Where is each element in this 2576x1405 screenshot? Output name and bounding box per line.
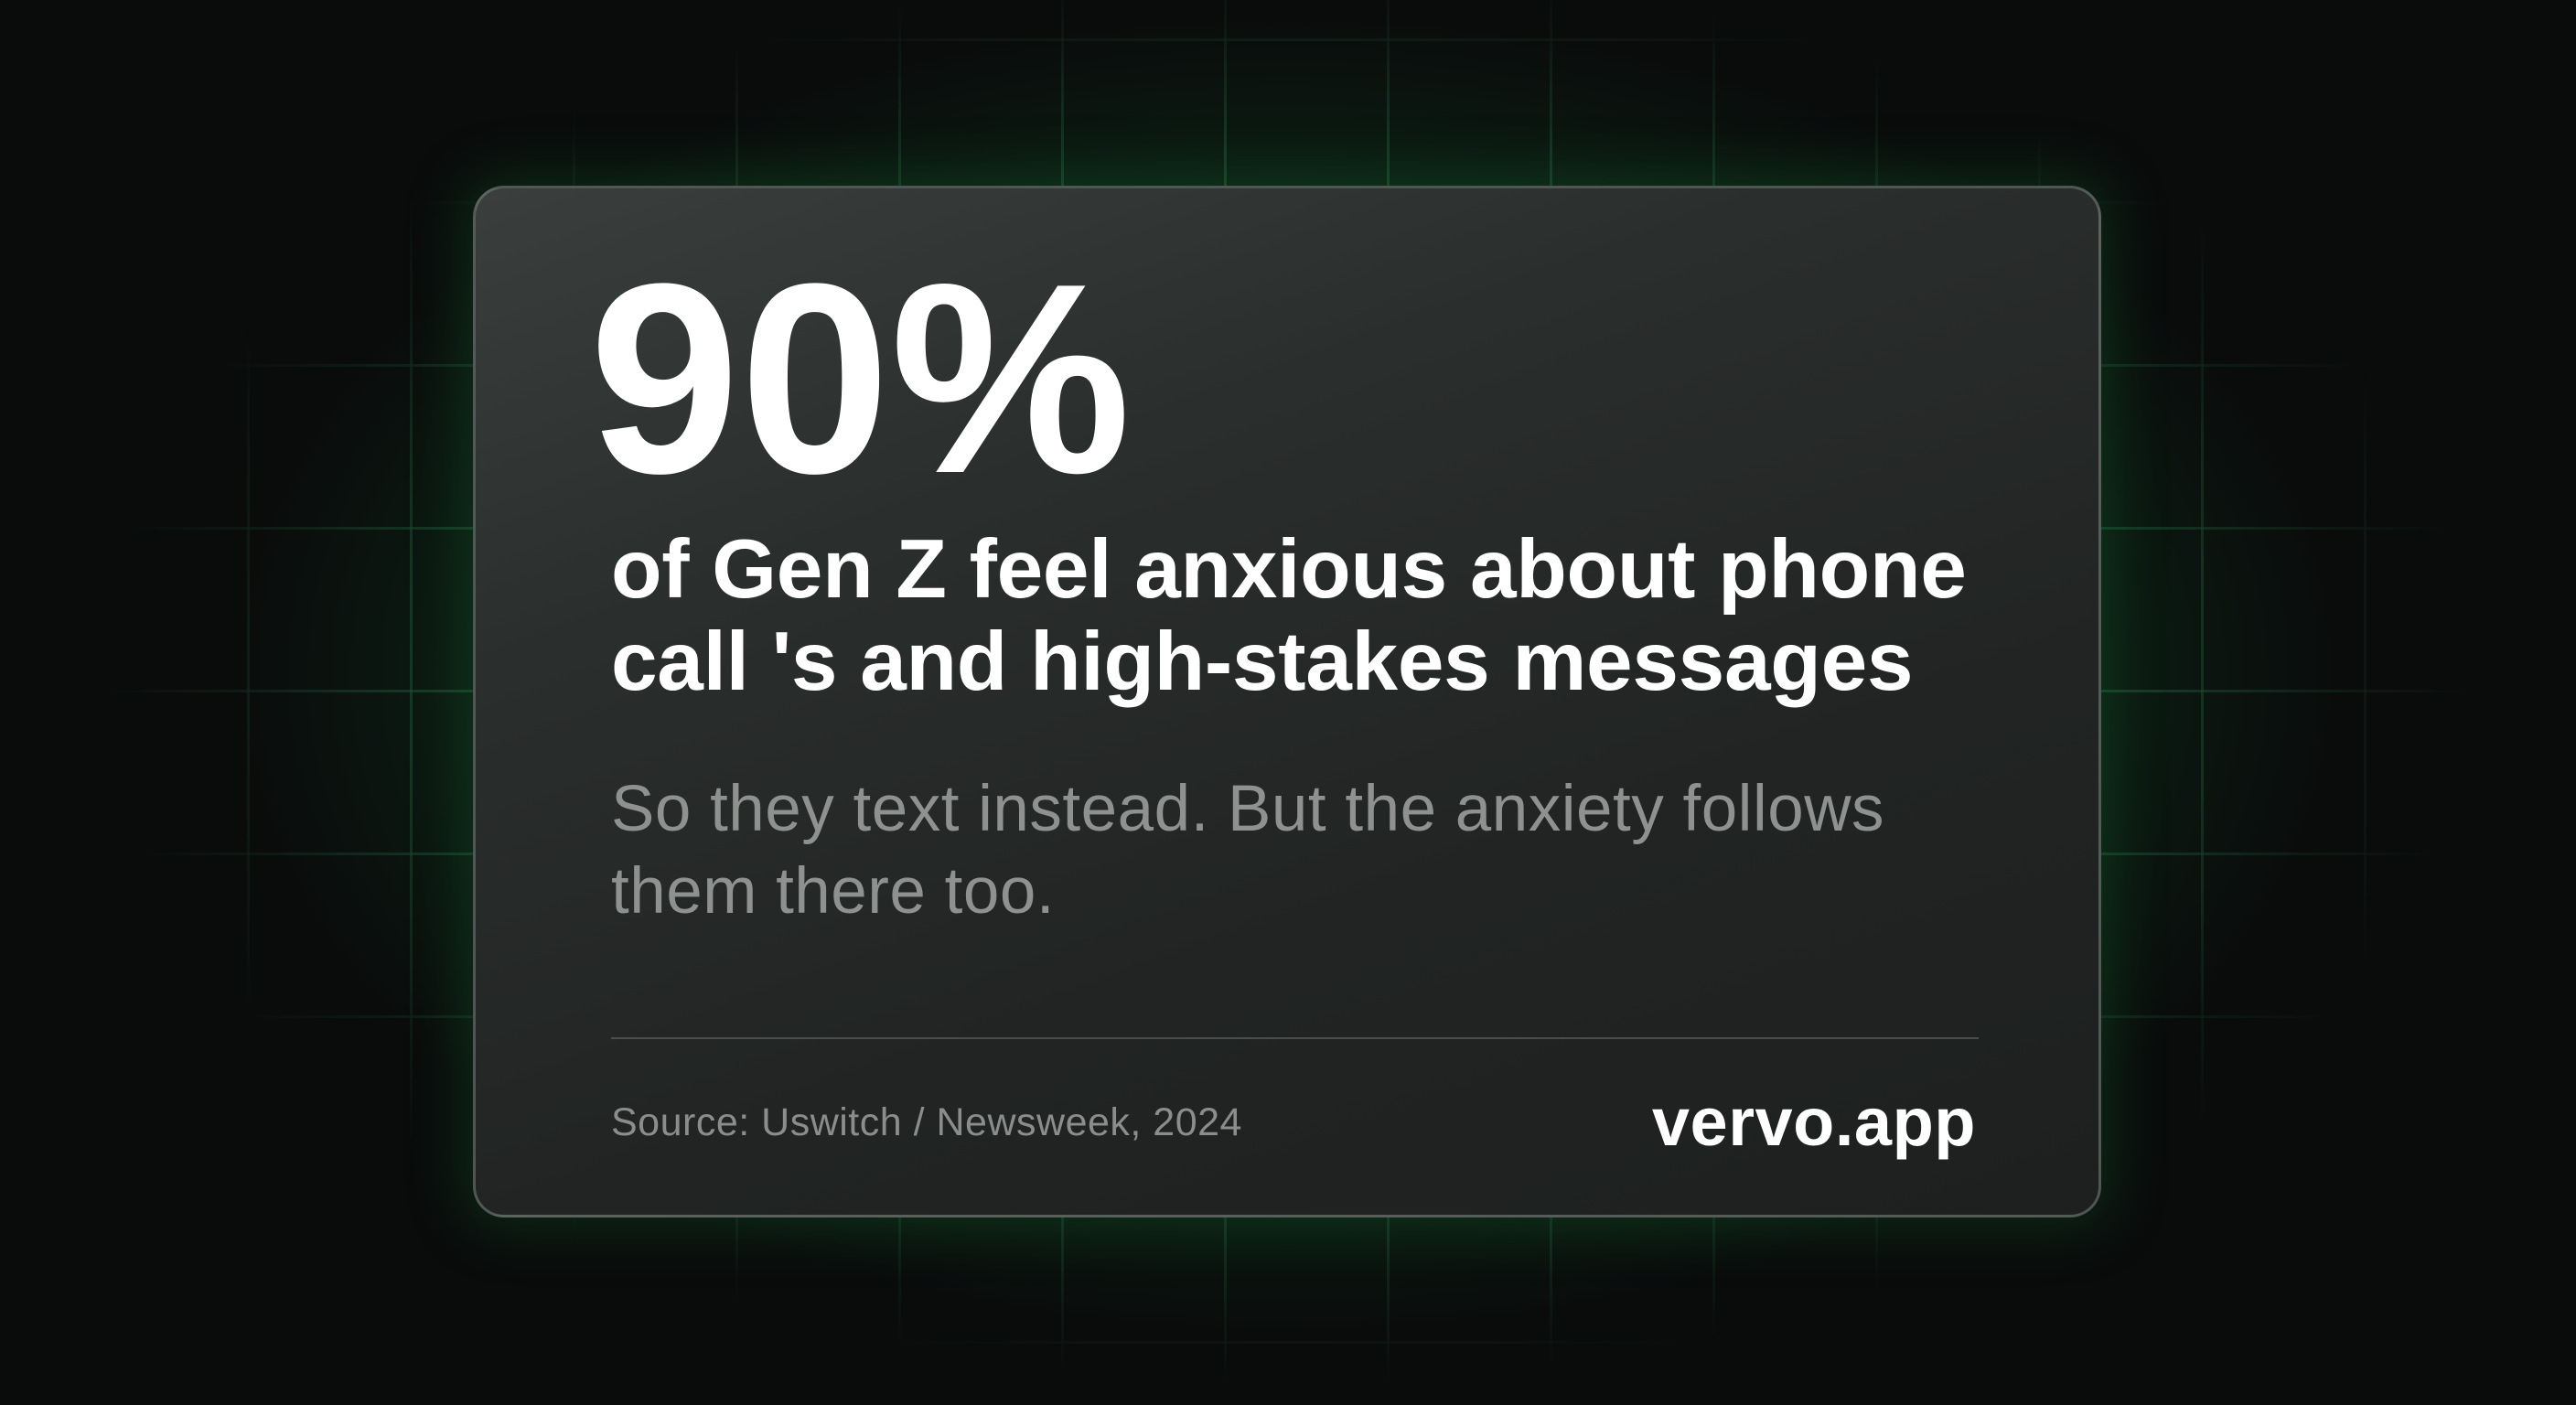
brand: vervo.app: vervo.app <box>1652 1084 1976 1160</box>
headline: of Gen Z feel anxious about phone <box>611 523 1967 616</box>
subtitle: them there too. <box>611 855 1055 928</box>
big stat 90%: 90% <box>589 227 1131 530</box>
subtitle: So they text instead. But the anxiety follows <box>611 773 1884 845</box>
source text: Source: Uswitch / Newsweek, 2024 <box>611 1100 1242 1144</box>
panel: stat card <box>473 186 2101 1217</box>
subtitle <box>611 773 1884 928</box>
headline: call 's and high-stakes messages <box>611 616 1913 708</box>
headline <box>611 523 1967 708</box>
divider <box>611 1037 1979 1039</box>
